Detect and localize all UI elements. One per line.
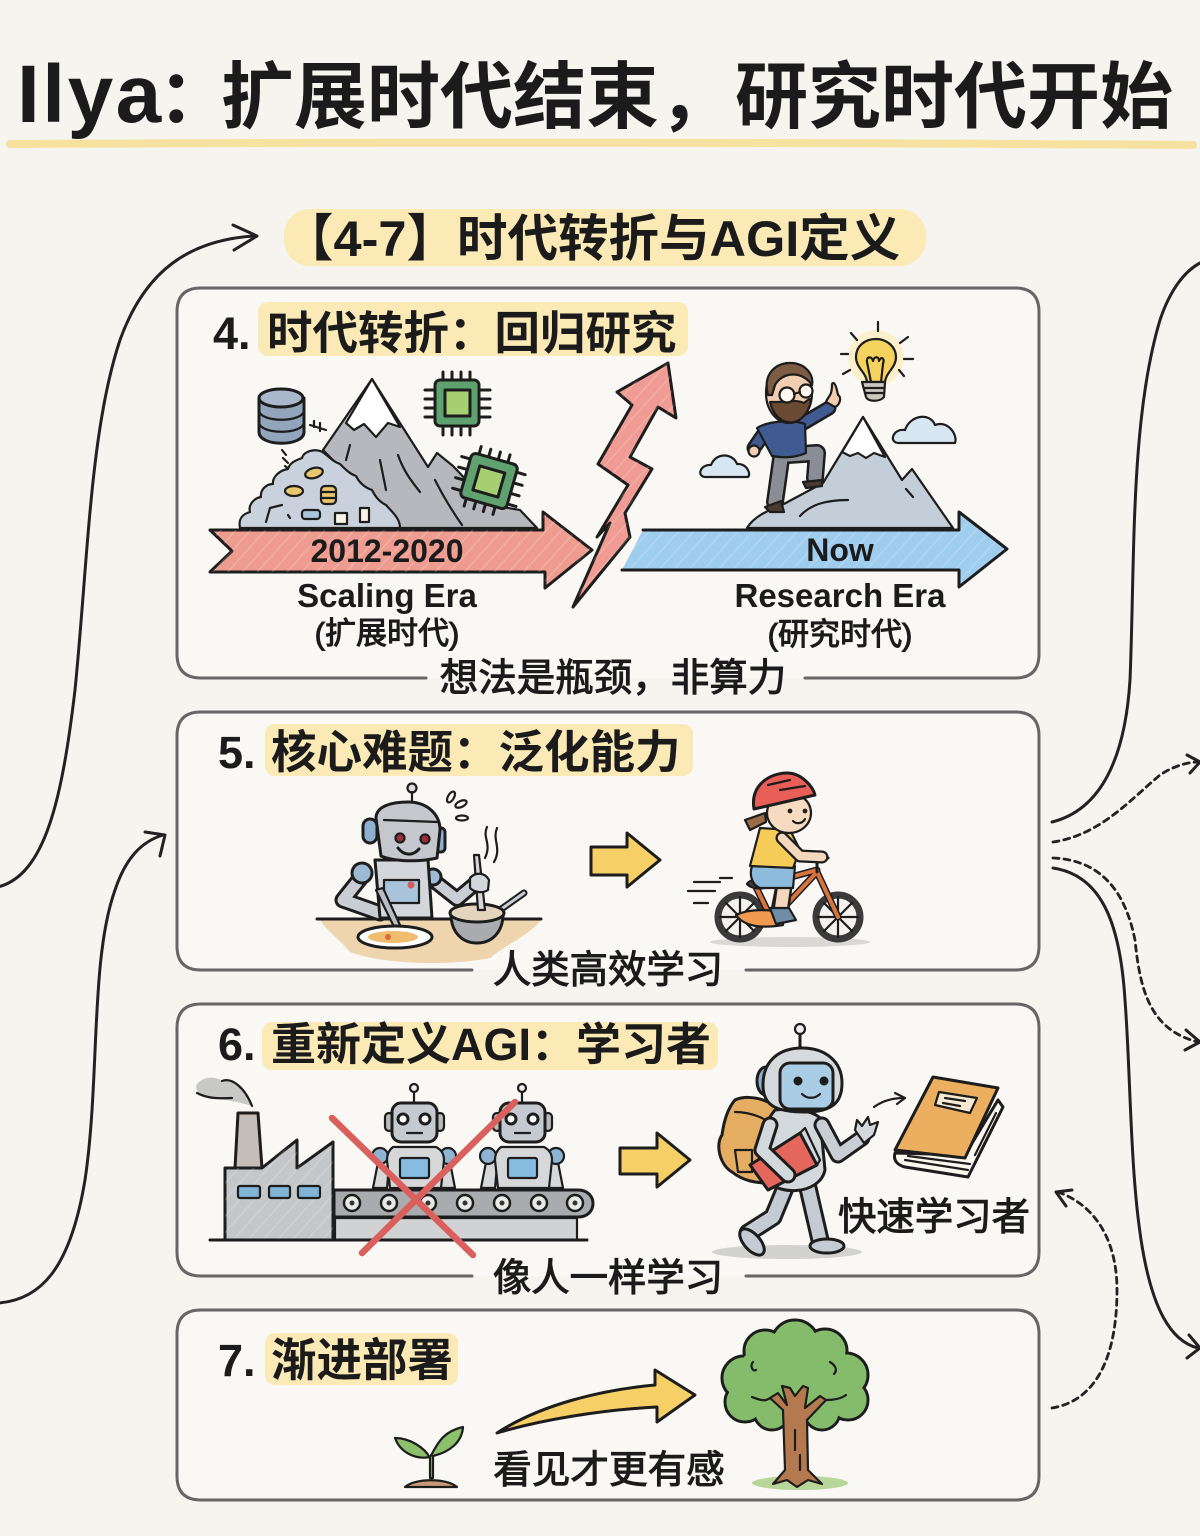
icon: red cross [332, 1102, 515, 1255]
icon: mountain [323, 379, 537, 528]
heading 6: 6. [218, 1019, 256, 1070]
title text: Ilya [17, 49, 164, 140]
heading 4: 4. [213, 308, 251, 359]
arrow: solid to lower right [1053, 868, 1200, 1358]
heading 5: 核心难题：泛化能力 [271, 727, 681, 778]
heading 5: 5. [218, 727, 256, 778]
icon: sprout [395, 1427, 463, 1487]
arrow: curved yellow growth [497, 1370, 695, 1433]
research era label: Research Era [735, 577, 946, 614]
heading 6: 重新定义AGI：学习者 [271, 1019, 711, 1070]
icon: chip 2 [449, 442, 529, 520]
heading 7: 渐进部署 [271, 1335, 453, 1386]
panel: 6 redefine AGI [177, 1004, 1039, 1300]
icon: tree [722, 1320, 868, 1490]
panel: 4 era shift [177, 288, 1039, 700]
title text: ： [158, 57, 231, 138]
arrow: research era blue [622, 512, 1007, 587]
icon: learning robot [712, 1024, 905, 1259]
arrow: right upward flow [1052, 262, 1200, 822]
arrow: top left flow into section heading [0, 225, 257, 887]
title highlight underline [10, 143, 1193, 145]
icon: factory robot 2 [480, 1084, 564, 1188]
icon: child on bicycle [688, 773, 870, 947]
icon: small mountain [747, 417, 953, 528]
arrow: scaling era red: 2012-2020 [310, 533, 464, 569]
icon: factory [196, 1078, 333, 1240]
arrow: yellow right [591, 833, 660, 887]
icon: researcher climbing [748, 363, 840, 512]
caption 6: 像人一样学习 [493, 1257, 723, 1300]
caption 5: 人类高效学习 [493, 949, 723, 992]
title text: 研究时代开始 [735, 57, 1173, 138]
scaling era label: (扩展时代) [315, 616, 459, 651]
section heading: 【4-7】时代转折与AGI定义 [283, 210, 900, 267]
icon: database [259, 389, 326, 470]
scaling era label: Scaling Era [297, 577, 478, 614]
heading 7: 7. [218, 1335, 256, 1386]
panel: 5 generalization [177, 712, 1039, 992]
arrow: dashed to upper right [1053, 755, 1200, 842]
icon: table [317, 919, 541, 963]
icon: conveyor belt [210, 1190, 593, 1240]
icon: plate and pot [358, 855, 524, 948]
research era label [735, 577, 946, 652]
icon: lightning arrow [573, 363, 676, 607]
scaling era label [297, 577, 478, 651]
icon: data pile [240, 450, 400, 528]
arrow: research era blue: Now [806, 532, 874, 568]
arrow: dashed from panel 7 up to fast learner [1052, 1190, 1117, 1408]
title text: 扩展时代结束， [221, 57, 732, 138]
panel: 7 gradual deployment [177, 1310, 1039, 1500]
icon: book [894, 1077, 1003, 1177]
research era label: (研究时代) [768, 617, 912, 652]
arrow: lower left flow into panel 5 [0, 832, 165, 1303]
arrow: dashed to mid right [1053, 858, 1200, 1050]
icon: cooking robot [343, 784, 497, 937]
fast learner label: 快速学习者 [838, 1196, 1030, 1239]
arrow: yellow right [620, 1133, 690, 1187]
icon: clouds [700, 417, 956, 477]
title [10, 49, 1193, 145]
icon: lightbulb [841, 322, 913, 401]
heading 4: 时代转折：回归研究 [267, 308, 677, 359]
icon: factory robot 1 [372, 1084, 456, 1188]
icon: chip 1 [425, 372, 490, 435]
caption 7: 看见才更有感 [493, 1449, 725, 1492]
arrow: scaling era red [210, 512, 592, 588]
caption 4: 想法是瓶颈，非算力 [440, 657, 786, 700]
